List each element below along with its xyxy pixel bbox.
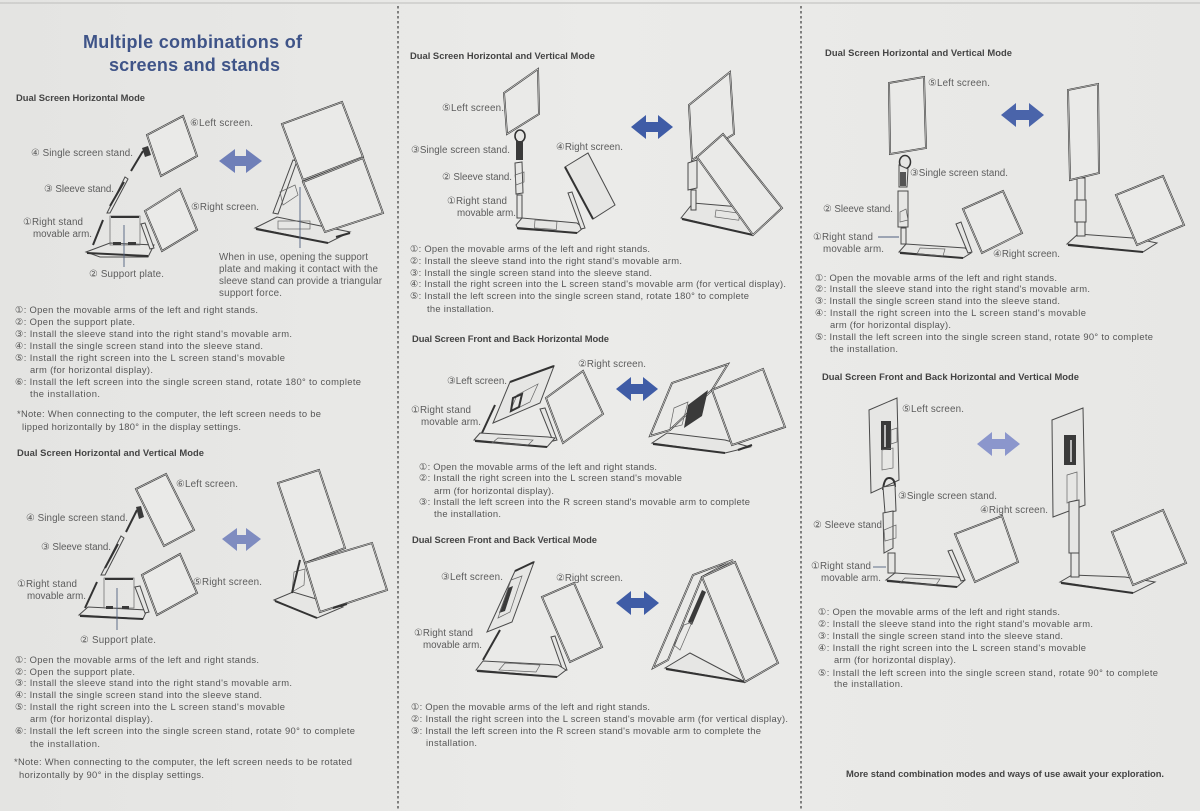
panel: right column [811, 47, 1186, 779]
footer note: More stand combination modes and ways of use await your exploration. [846, 768, 1164, 779]
heading: dual screen horizontal mode: Dual Screen Horizontal Mode [16, 92, 145, 103]
labels: right horizontal and vertical parts [813, 78, 1060, 260]
labels: front and back horizontal parts: ①Right stand [411, 405, 471, 416]
diagram: front and back horizontal and vertical assembled [1052, 408, 1186, 593]
heading: right horizontal and vertical mode: Dual Screen Horizontal and Vertical Mode [825, 47, 1012, 58]
labels: horizontal mode parts [23, 118, 259, 280]
labels: horizontal and vertical parts: movable arm. [27, 591, 86, 602]
labels: horizontal mode parts: ④ Single screen stand. [31, 148, 133, 159]
arrow: horizontal and vertical mode [222, 528, 261, 551]
note: horizontal and vertical mode: *Note: When connecting to the computer, the left screen needs to be rotated [14, 756, 352, 767]
panel: middle column [410, 50, 788, 748]
steps: middle horizontal and vertical mode: ①: Open the movable arms of the left and right stands. [410, 243, 650, 254]
steps: front and back horizontal and vertical: ③: Install the single screen stand into the sleeve stand. [818, 630, 1063, 641]
labels: horizontal and vertical parts: ⑤Right screen. [193, 577, 262, 588]
heading: middle horizontal and vertical mode: Dual Screen Horizontal and Vertical Mode [410, 50, 595, 61]
steps: front and back vertical: ③: Install the left screen into the R screen stand's movable arm to complete the [411, 725, 761, 736]
labels: horizontal mode parts: ② Support plate. [89, 269, 164, 280]
labels: horizontal mode parts: ⑤Right screen. [191, 202, 259, 213]
steps: horizontal mode [15, 304, 361, 399]
labels: right horizontal and vertical parts: ①Right stand [813, 232, 873, 243]
steps: horizontal mode: the installation. [30, 388, 100, 399]
steps: front and back vertical: ①: Open the movable arms of the left and right stands. [411, 701, 650, 712]
labels: horizontal mode parts: ③ Sleeve stand. [44, 184, 114, 195]
steps: horizontal and vertical mode: ⑤: Install the right screen into the L screen stand's movable [15, 701, 285, 712]
callout line: support plate [116, 588, 118, 630]
steps: front and back vertical: installation. [426, 737, 477, 748]
callout: triangular support: When in use, opening the support [219, 252, 368, 263]
steps: front and back horizontal and vertical [818, 606, 1158, 689]
note: horizontal mode: lipped horizontally by 180° in the display settings. [22, 421, 241, 432]
labels: front and back vertical parts: ①Right stand [414, 628, 473, 639]
steps: horizontal and vertical mode: ②: Open the support plate. [15, 666, 135, 677]
diagram: front and back horizontal assembled [650, 364, 785, 453]
steps: front and back horizontal and vertical: ①: Open the movable arms of the left and right stands. [818, 606, 1060, 617]
steps: horizontal and vertical mode: ④: Install the single screen stand into the sleeve stand. [15, 689, 262, 700]
labels: horizontal mode parts: ⑥Left screen. [190, 118, 253, 129]
labels: front and back horizontal and vertical parts: ② Sleeve stand [813, 520, 882, 531]
callout line: right stand arm [878, 236, 899, 238]
steps: horizontal and vertical mode: ③: Install the sleeve stand into the right stand's movable arm. [15, 677, 292, 688]
labels: horizontal and vertical parts: ①Right stand [17, 579, 77, 590]
labels: front and back horizontal and vertical parts [811, 404, 1048, 584]
labels: front and back horizontal and vertical parts: movable arm. [821, 573, 881, 584]
heading: front and back horizontal mode: Dual Screen Front and Back Horizontal Mode [412, 333, 609, 344]
steps: front and back vertical: ②: Install the right screen into the L screen stand's movable arm (for vertical display). [411, 713, 788, 724]
panel: left column [14, 32, 387, 780]
labels: front and back vertical parts: movable arm. [423, 640, 482, 651]
steps: front and back horizontal and vertical: arm (for horizontal display). [834, 654, 956, 665]
steps: horizontal and vertical mode: arm (for horizontal display). [30, 713, 153, 724]
steps: horizontal mode: ②: Open the support plate. [15, 316, 135, 327]
steps: front and back horizontal: the installation. [434, 508, 501, 519]
title: Multiple combinations of [83, 32, 303, 52]
steps: middle horizontal and vertical mode [410, 243, 786, 314]
callout: triangular support: sleeve stand can provide a triangular [219, 276, 383, 287]
steps: front and back horizontal and vertical: the installation. [834, 678, 903, 689]
labels: middle horizontal and vertical parts: ③Single screen stand. [411, 145, 510, 156]
steps: front and back horizontal: arm (for horizontal display). [434, 485, 554, 496]
labels: horizontal and vertical parts: ② Support plate. [80, 635, 156, 646]
steps: right horizontal and vertical: ⑤: Install the left screen into the single screen stand, rotate 90° to complete [815, 331, 1153, 342]
callout line: triangular support [299, 187, 301, 248]
note: horizontal mode: *Note: When connecting to the computer, the left screen needs to be [17, 408, 321, 419]
heading: dual screen horizontal and vertical mode: Dual Screen Horizontal and Vertical Mode [17, 447, 204, 458]
steps: front and back vertical [411, 701, 788, 748]
labels: front and back horizontal parts: ②Right screen. [578, 359, 646, 370]
steps: middle horizontal and vertical mode: ③: Install the single screen stand into the sleeve stand. [410, 267, 652, 278]
labels: middle horizontal and vertical parts: ② Sleeve stand. [442, 172, 512, 183]
callout line: support plate [123, 225, 125, 267]
steps: middle horizontal and vertical mode: ④: Install the right screen into the L screen stand's movable arm (for vertical display). [410, 278, 786, 289]
callout: triangular support: plate and making it contact with the [219, 264, 379, 275]
steps: horizontal mode: ③: Install the sleeve stand into the right stand's movable arm. [15, 328, 292, 339]
labels: right horizontal and vertical parts: ② Sleeve stand. [823, 204, 893, 215]
labels: right horizontal and vertical parts: ⑤Left screen. [928, 78, 990, 89]
note: horizontal mode [17, 408, 321, 432]
steps: front and back horizontal [419, 461, 750, 519]
steps: right horizontal and vertical: ①: Open the movable arms of the left and right stands. [815, 272, 1057, 283]
diagram: front and back vertical parts [476, 562, 602, 677]
steps: front and back horizontal and vertical: ⑤: Install the left screen into the single screen stand, rotate 90° to complete [818, 667, 1158, 678]
steps: horizontal mode: ⑥: Install the left screen into the single screen stand, rotate 180° to complete [15, 376, 361, 387]
steps: horizontal and vertical mode: ①: Open the movable arms of the left and right stands. [15, 654, 259, 665]
callout line: front and back right stand arm [873, 566, 886, 568]
labels: front and back horizontal parts: movable arm. [421, 417, 481, 428]
labels: right horizontal and vertical parts: movable arm. [823, 244, 884, 255]
labels: horizontal and vertical parts [17, 479, 262, 646]
diagram: horizontal and vertical parts [79, 474, 197, 630]
labels: horizontal and vertical parts: ⑥Left screen. [176, 479, 238, 490]
steps: middle horizontal and vertical mode: the installation. [427, 303, 494, 314]
arrow: front and back vertical [616, 591, 659, 615]
steps: right horizontal and vertical: ②: Install the sleeve stand into the right stand's movable arm. [815, 283, 1090, 294]
diagram: horizontal and vertical assembled [274, 470, 387, 618]
labels: front and back horizontal and vertical parts: ⑤Left screen. [902, 404, 964, 415]
steps: right horizontal and vertical: arm (for horizontal display). [830, 319, 951, 330]
steps: horizontal mode: ④: Install the single screen stand into the sleeve stand. [15, 340, 263, 351]
steps: horizontal and vertical mode: ⑥: Install the left screen into the single screen stand, rotate 90° to complete [15, 725, 355, 736]
steps: middle horizontal and vertical mode: ⑤: Install the left screen into the single screen stand, rotate 180° to complete [410, 290, 749, 301]
arrow: front and back horizontal [616, 377, 658, 401]
heading: front and back horizontal and vertical: Dual Screen Front and Back Horizontal and Vertical Mode [822, 371, 1079, 382]
labels: middle horizontal and vertical parts: ⑤Left screen. [442, 103, 504, 114]
diagram: middle horizontal and vertical assembled [681, 72, 782, 235]
callout: triangular support [219, 252, 383, 299]
diagram: horizontal mode assembled [255, 102, 383, 248]
heading: front and back vertical mode: Dual Screen Front and Back Vertical Mode [412, 534, 597, 545]
labels: front and back horizontal parts [411, 359, 646, 428]
steps: middle horizontal and vertical mode: ②: Install the sleeve stand into the right stand's movable arm. [410, 255, 682, 266]
steps: front and back horizontal and vertical: ②: Install the sleeve stand into the right stand's movable arm. [818, 618, 1093, 629]
diagram: front and back vertical assembled [653, 560, 778, 682]
callout: triangular support: support force. [219, 288, 282, 299]
labels: middle horizontal and vertical parts [411, 103, 623, 219]
labels: front and back horizontal parts: ③Left screen. [447, 376, 507, 387]
labels: horizontal mode parts: ①Right stand [23, 217, 83, 228]
steps: right horizontal and vertical: ③: Install the single screen stand into the sleeve stand. [815, 295, 1060, 306]
labels: middle horizontal and vertical parts: movable arm. [457, 208, 516, 219]
arrow: horizontal mode [219, 149, 262, 173]
steps: front and back horizontal and vertical: ④: Install the right screen into the L screen stand's movable [818, 642, 1086, 653]
steps: horizontal mode: ①: Open the movable arms of the left and right stands. [15, 304, 258, 315]
steps: front and back horizontal: ③: Install the left screen into the R screen stand's movable arm to complete [419, 496, 750, 507]
note: horizontal and vertical mode [14, 756, 352, 780]
diagram: right horizontal and vertical parts [878, 77, 1022, 258]
labels: front and back vertical parts [414, 572, 623, 651]
steps: front and back horizontal: ①: Open the movable arms of the left and right stands. [419, 461, 657, 472]
labels: horizontal and vertical parts: ④ Single screen stand. [26, 513, 128, 524]
steps: front and back horizontal: ②: Install the right screen into the L screen stand's movable [419, 472, 682, 483]
labels: front and back vertical parts: ②Right screen. [556, 573, 623, 584]
steps: right horizontal and vertical: ④: Install the right screen into the L screen stand's movable [815, 307, 1086, 318]
labels: middle horizontal and vertical parts: ④Right screen. [556, 142, 623, 153]
note: horizontal and vertical mode: horizontally by 90° in the display settings. [19, 769, 204, 780]
labels: middle horizontal and vertical parts: ①Right stand [447, 196, 507, 207]
title: screens and stands [109, 55, 280, 75]
steps: horizontal mode: ⑤: Install the right screen into the L screen stand's movable [15, 352, 285, 363]
diagram: front and back horizontal parts [474, 366, 603, 447]
labels: front and back horizontal and vertical parts: ③Single screen stand. [898, 491, 997, 502]
labels: front and back horizontal and vertical parts: ④Right screen. [980, 505, 1048, 516]
diagram: middle horizontal and vertical parts [504, 69, 615, 233]
steps: right horizontal and vertical [815, 272, 1153, 354]
labels: horizontal mode parts: movable arm. [33, 229, 92, 240]
arrow: right horizontal and vertical [1001, 103, 1044, 127]
labels: right horizontal and vertical parts: ③Single screen stand. [910, 168, 1008, 179]
steps: horizontal and vertical mode: the installation. [30, 738, 100, 749]
labels: horizontal and vertical parts: ③ Sleeve stand. [41, 542, 111, 553]
labels: right horizontal and vertical parts: ④Right screen. [993, 249, 1060, 260]
arrow: middle horizontal and vertical mode [631, 115, 673, 139]
labels: front and back vertical parts: ③Left screen. [441, 572, 503, 583]
arrow: front and back horizontal and vertical [977, 432, 1020, 456]
diagram: right horizontal and vertical assembled [1067, 84, 1184, 252]
steps: right horizontal and vertical: the installation. [830, 343, 898, 354]
diagram: horizontal mode parts [86, 116, 197, 267]
steps: horizontal and vertical mode [15, 654, 355, 749]
steps: horizontal mode: arm (for horizontal display). [30, 364, 153, 375]
labels: front and back horizontal and vertical parts: ①Right stand [811, 561, 871, 572]
diagram: front and back horizontal and vertical parts [869, 398, 1018, 587]
title [83, 32, 303, 75]
